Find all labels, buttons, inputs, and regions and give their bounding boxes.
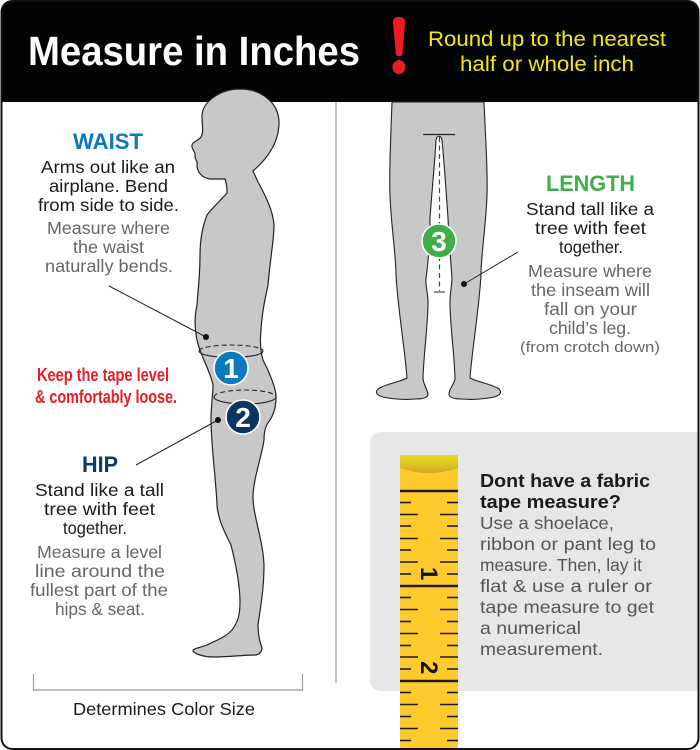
length measuring note: the inseam will <box>531 280 650 300</box>
waist heading: WAIST <box>73 129 144 154</box>
hip tape loop <box>214 390 276 404</box>
rounding note <box>428 27 666 76</box>
length measuring note: fall on your <box>544 299 637 319</box>
tape number 2: 2 <box>415 661 442 674</box>
panel body text: tape measure to get <box>480 597 654 617</box>
waist measuring note <box>45 218 173 276</box>
hip instructions: tree with feet <box>44 499 155 519</box>
badge 2: 2 <box>235 402 251 433</box>
panel heading <box>480 471 650 512</box>
length heading: LENGTH <box>546 171 635 196</box>
length measuring note: Measure where <box>528 261 652 281</box>
length measuring note: (from crotch down) <box>520 339 660 356</box>
hip instructions <box>35 480 164 538</box>
side view child figure <box>192 89 279 657</box>
rounding note: half or whole inch <box>460 52 634 76</box>
hip measuring note: Measure a level <box>37 542 162 562</box>
badge 2 <box>226 400 260 434</box>
hip measuring note <box>30 542 168 619</box>
panel body text: a numerical <box>480 618 581 638</box>
panel: fabric tape alternative <box>370 432 699 691</box>
hip leader <box>136 417 221 465</box>
badge 1: 1 <box>223 353 239 384</box>
hip text <box>30 452 168 619</box>
badge 3: 3 <box>431 226 447 257</box>
length measuring note: child’s leg. <box>549 318 631 338</box>
hip measuring note: fullest part of the <box>30 580 168 600</box>
waist instructions: Arms out like an <box>41 157 175 177</box>
red tape reminder: & comfortably loose. <box>35 387 177 407</box>
waist measuring note: the waist <box>73 237 144 257</box>
inseam line <box>423 134 455 292</box>
color size label: Determines Color Size <box>73 699 255 719</box>
red tape reminder: Keep the tape level <box>37 365 169 385</box>
length text <box>520 171 660 356</box>
waist text <box>38 129 179 276</box>
rounding note: Round up to the nearest <box>428 27 666 51</box>
red tape reminder <box>35 365 177 407</box>
back view legs figure <box>376 102 501 399</box>
waist measuring note: naturally bends. <box>45 256 173 276</box>
panel body text <box>480 513 656 659</box>
length instructions: together. <box>559 237 623 257</box>
panel body text: ribbon or pant leg to <box>480 534 656 554</box>
hip measuring note: hips & seat. <box>55 599 145 619</box>
length instructions: Stand tall like a <box>526 199 654 219</box>
panel heading: Dont have a fabric <box>480 471 650 491</box>
title: Measure in Inches <box>28 28 360 74</box>
waist instructions: from side to side. <box>38 195 179 215</box>
panel body text: flat & use a ruler or <box>480 576 652 596</box>
panel heading: tape measure? <box>480 492 621 512</box>
length leader <box>461 252 518 287</box>
panel body text: measurement. <box>480 639 603 659</box>
panel body text: Use a shoelace, <box>480 513 614 533</box>
waist leader <box>109 286 209 340</box>
badge 1 <box>214 351 248 385</box>
hip heading: HIP <box>82 452 118 477</box>
icon: red exclamation mark <box>392 17 405 74</box>
hip instructions: together. <box>63 518 127 538</box>
hip instructions: Stand like a tall <box>35 480 164 500</box>
waist instructions <box>38 157 179 215</box>
color size bracket <box>34 674 302 690</box>
length measuring note <box>520 261 660 356</box>
divider <box>335 102 337 683</box>
panel body text: measure. Then, lay it <box>480 555 642 575</box>
badge 3 <box>422 224 456 258</box>
length instructions: tree with feet <box>535 218 646 238</box>
waist instructions: airplane. Bend <box>49 176 168 196</box>
waist tape loop <box>199 345 263 358</box>
hip measuring note: line around the <box>35 561 165 581</box>
header band <box>1 1 699 102</box>
tape number 1: 1 <box>415 567 442 580</box>
icon: yellow tape measure <box>400 455 458 750</box>
length instructions <box>526 199 654 257</box>
waist measuring note: Measure where <box>47 218 170 238</box>
